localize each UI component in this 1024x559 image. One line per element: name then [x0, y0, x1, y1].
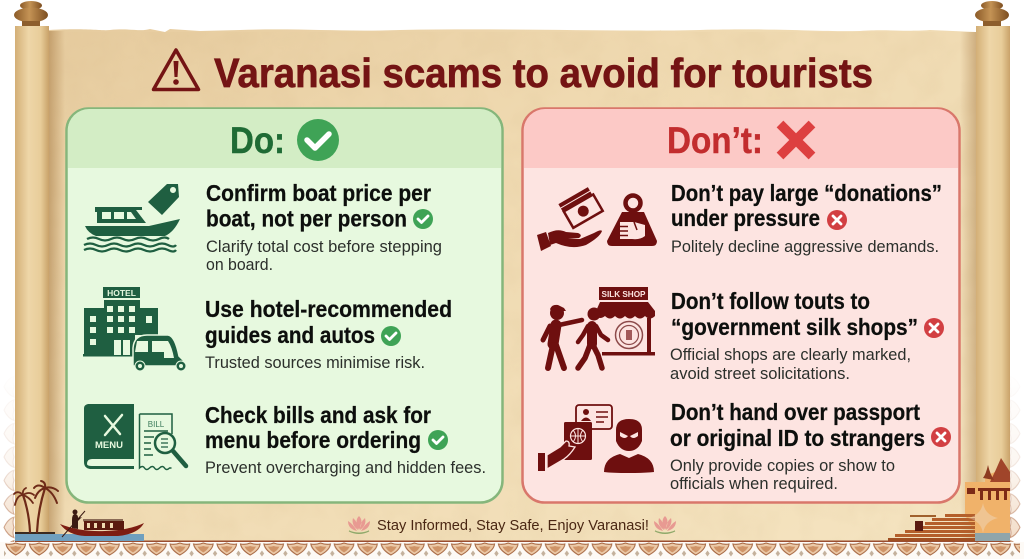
item: hotel guides	[83, 287, 452, 372]
icon: large check	[297, 119, 339, 161]
panel background	[66, 108, 502, 502]
heading line 2: under pressure	[671, 205, 820, 231]
item: boat price	[84, 180, 442, 274]
icon: hotel and auto rickshaw	[83, 287, 186, 371]
heading: Don’t follow touts to	[671, 288, 870, 314]
icon: cross	[827, 210, 847, 230]
item: bills and menu	[84, 402, 486, 477]
illustration: palm trees and boat	[14, 481, 144, 541]
description line 2: on board.	[206, 256, 273, 274]
description: Politely decline aggressive demands.	[671, 238, 939, 256]
title text: Varanasi scams to avoid for tourists	[214, 50, 873, 96]
right roller	[975, 1, 1010, 541]
heading: dont: Don’t:	[667, 120, 763, 161]
description: Official shops are clearly marked,	[670, 346, 911, 364]
water	[975, 533, 1010, 541]
icon: boat and price tag	[84, 184, 180, 252]
panel header band	[68, 109, 501, 168]
roller shadow left	[49, 31, 65, 541]
description: Prevent overcharging and hidden fees.	[205, 459, 486, 477]
description line 2: avoid street solicitations.	[670, 365, 850, 383]
icon: cross	[931, 427, 951, 447]
illustration: ghat steps and temple	[888, 458, 1010, 541]
description: Trusted sources minimise risk.	[205, 354, 425, 372]
heading: Confirm boat price per	[206, 180, 431, 206]
description: Only provide copies or show to	[670, 457, 895, 475]
temple	[965, 458, 1010, 533]
sparkle	[968, 503, 998, 533]
boat with boatman	[60, 510, 144, 537]
icon: large cross	[780, 124, 812, 156]
icon: cross	[924, 318, 944, 338]
item: passport	[538, 399, 951, 493]
icon: warning triangle	[154, 50, 198, 90]
icon: menu book and bill: BILL	[148, 420, 165, 429]
footer slogan	[348, 516, 676, 534]
bottom ornamental border	[0, 540, 1024, 559]
heading line 2: boat, not per person	[206, 206, 407, 232]
side ornamental borders	[4, 393, 1020, 542]
icon: check	[381, 326, 401, 346]
heading line 2: “government silk shops”	[671, 314, 918, 340]
panel header band	[524, 109, 958, 168]
heading: Don’t hand over passport	[671, 399, 920, 425]
heading line 2: guides and autos	[205, 322, 375, 348]
heading: Don’t pay large “donations”	[671, 180, 942, 206]
water	[15, 534, 144, 541]
icon: hotel and auto rickshaw: HOTEL	[107, 288, 136, 298]
left roller	[14, 1, 49, 541]
panel: dont	[522, 108, 960, 502]
item: donations	[537, 180, 942, 256]
icon: menu book and bill	[84, 404, 186, 470]
panel: do	[66, 108, 502, 502]
icon: check	[428, 430, 448, 450]
slogan text: Stay Informed, Stay Safe, Enjoy Varanasi!	[377, 518, 649, 534]
description: Clarify total cost before stepping	[206, 238, 442, 256]
palm trees	[14, 481, 58, 534]
icon: money and weight	[537, 187, 657, 251]
roller shadow right	[960, 32, 976, 541]
heading line 2: or original ID to strangers	[670, 425, 925, 451]
icon: menu book and bill: MENU	[95, 440, 123, 451]
description line 2: officials when required.	[670, 475, 838, 493]
item: touts	[543, 287, 944, 383]
title	[154, 50, 873, 96]
icon: check	[413, 209, 433, 229]
ghat steps	[888, 514, 975, 541]
heading: do: Do:	[230, 120, 285, 161]
icon: lotus left	[348, 516, 370, 534]
icon: tout and silk shop: SILK SHOP	[602, 289, 646, 299]
heading line 2: menu before ordering	[205, 427, 421, 453]
panel background	[522, 108, 960, 502]
heading: Use hotel-recommended	[205, 296, 452, 322]
icon: lotus right	[654, 516, 676, 534]
icon: tout and silk shop	[543, 287, 655, 368]
heading: Check bills and ask for	[205, 402, 431, 428]
icon: passport and masked stranger	[538, 405, 654, 473]
